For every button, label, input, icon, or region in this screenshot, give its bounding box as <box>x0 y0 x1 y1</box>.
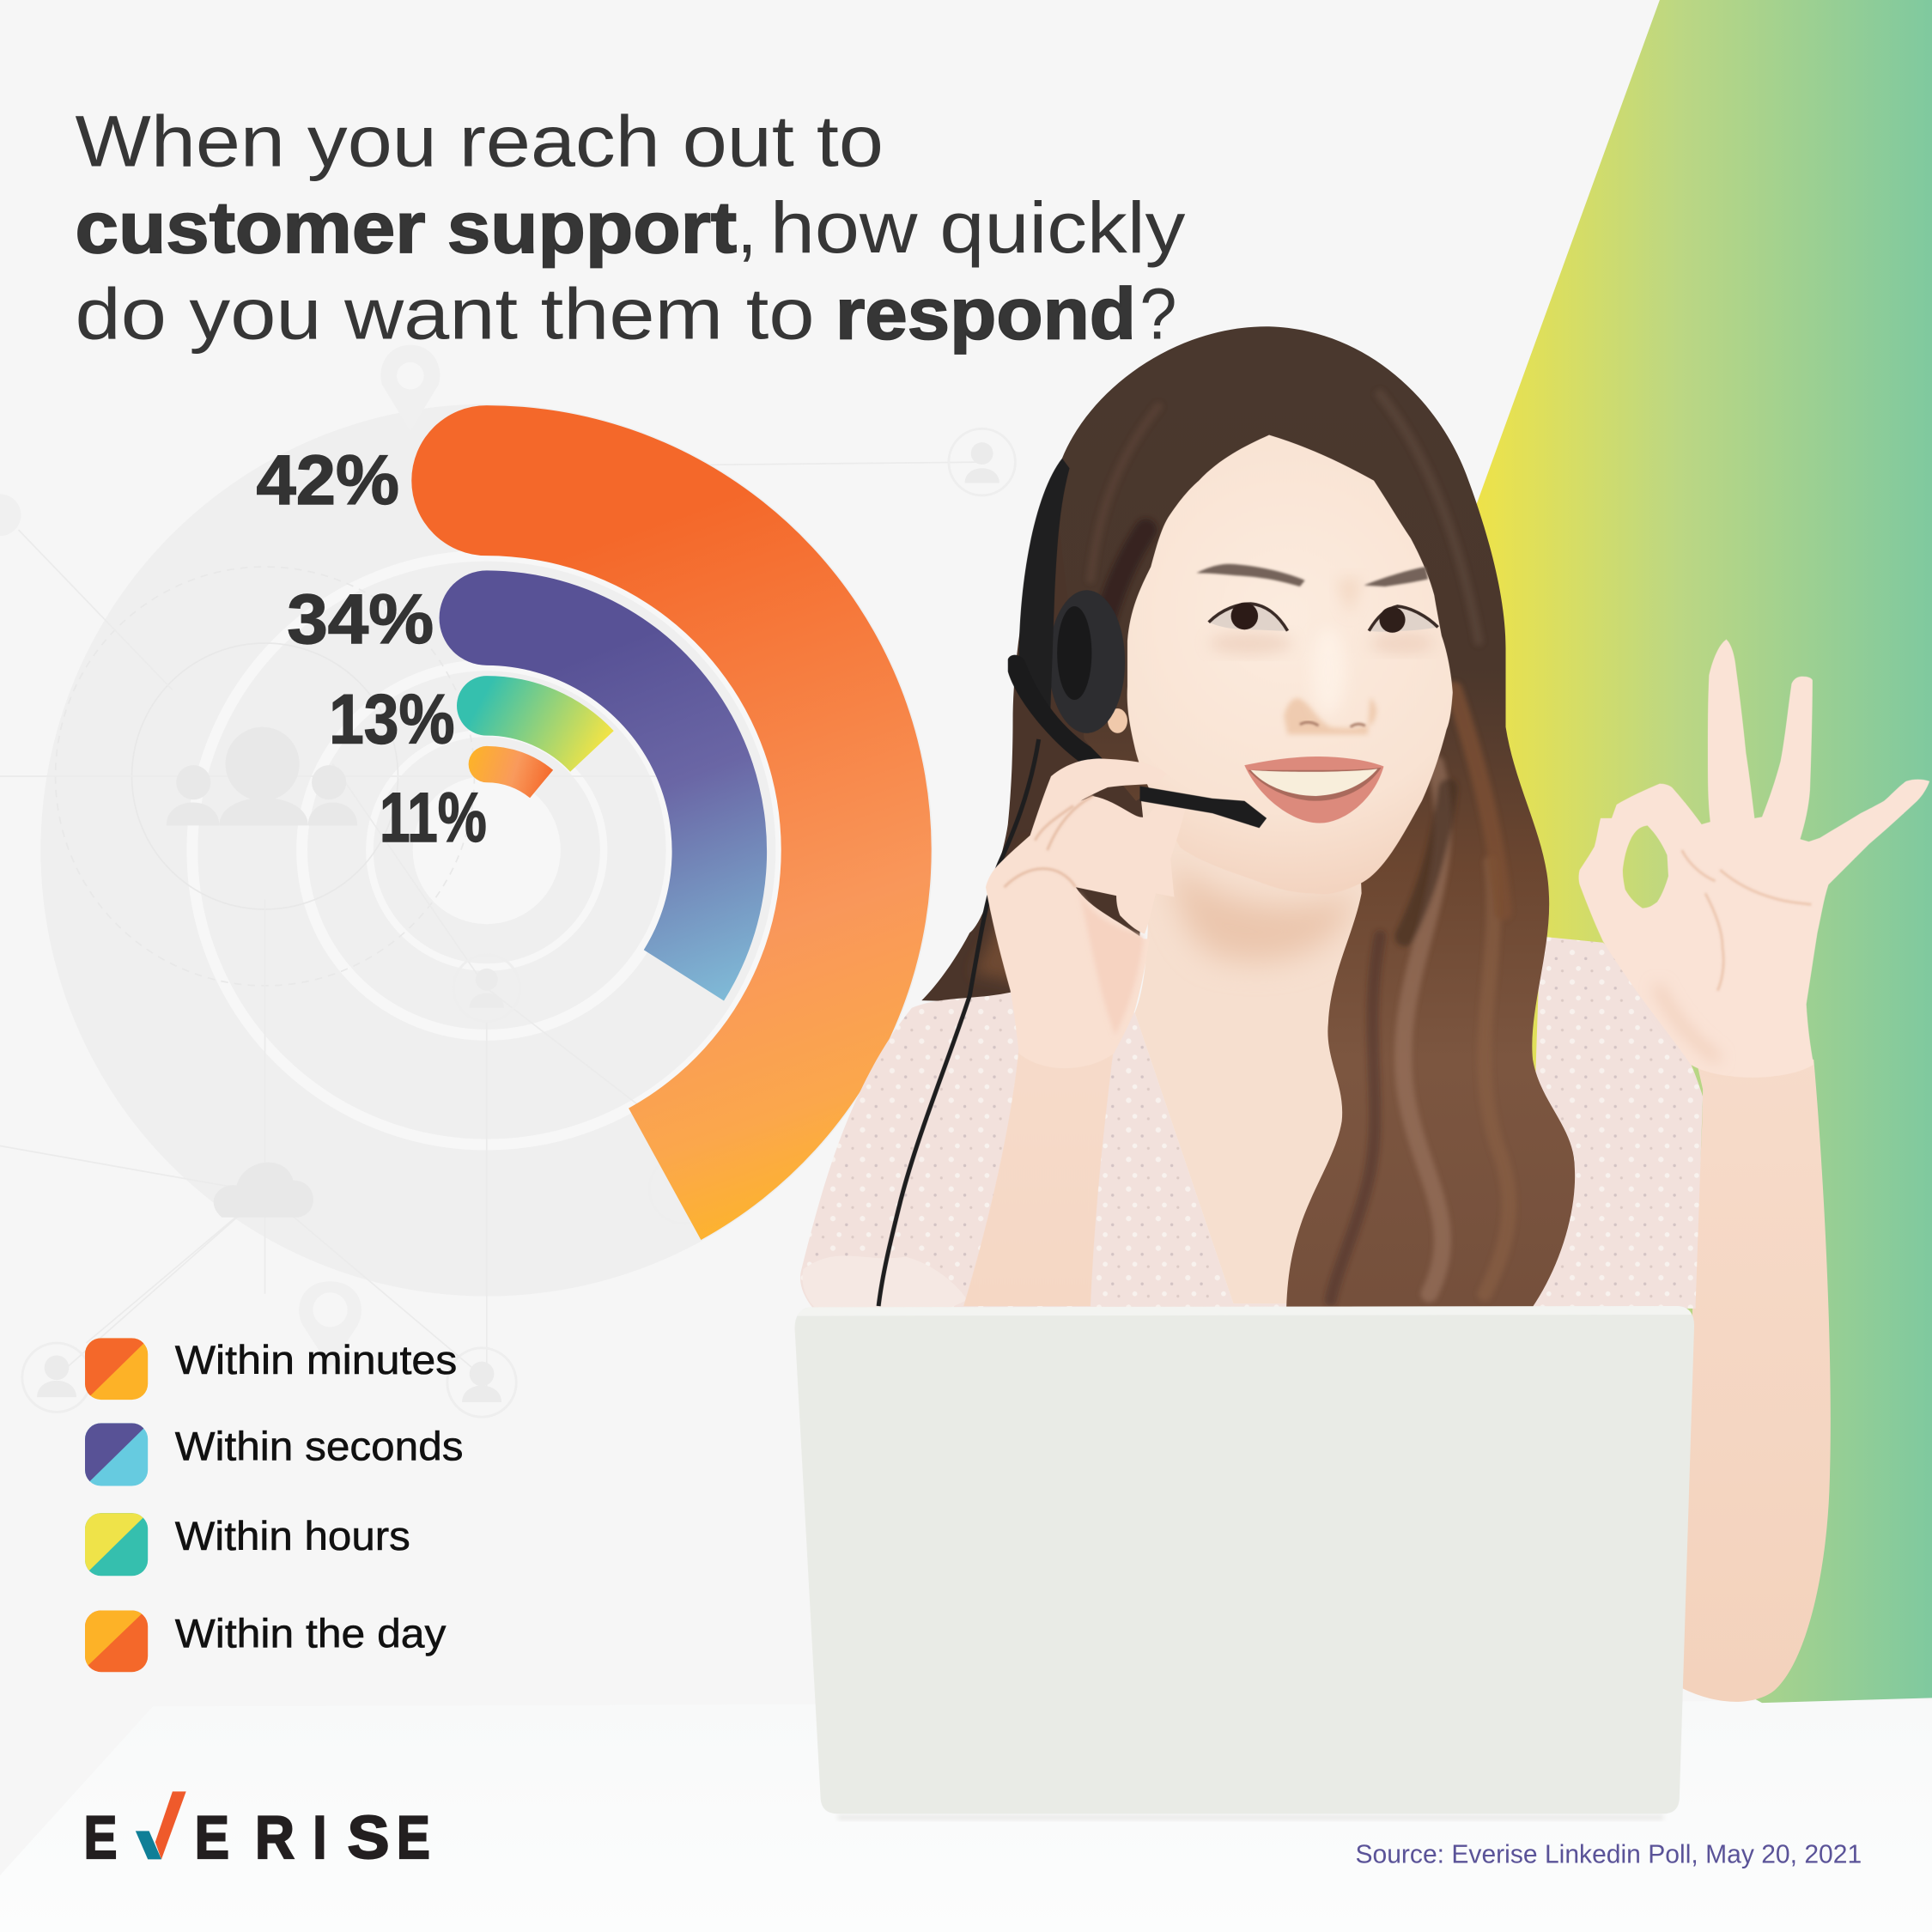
green gradient panel <box>1355 0 1932 1703</box>
bar: within minutes 42% <box>411 405 932 1240</box>
title: , <box>737 186 757 268</box>
headset cable <box>878 739 1039 1306</box>
finger details <box>1004 796 1093 887</box>
right arm <box>1682 1035 1831 1702</box>
legend item: within hours: Within hours <box>175 1514 410 1559</box>
Everise logo: S <box>348 1803 389 1871</box>
percentage labels: 34% <box>287 580 434 659</box>
radial bar chart <box>411 405 932 1240</box>
Everise logo: I <box>313 1803 326 1871</box>
microphone tip <box>1139 786 1267 828</box>
bar: within hours 13% <box>457 676 614 772</box>
legend item: within seconds: Within seconds <box>175 1424 464 1469</box>
Everise logo: R <box>255 1803 295 1871</box>
legend item: within minutes <box>85 1338 457 1401</box>
legend item: within the day: Within the day <box>175 1612 447 1657</box>
legend item: within minutes: Within minutes <box>175 1338 457 1383</box>
hair main <box>1060 326 1575 1309</box>
Everise logo: E <box>397 1803 430 1871</box>
left arm <box>963 1048 1114 1306</box>
woman with headset <box>800 326 1929 1702</box>
microphone boom <box>1008 655 1103 769</box>
hair strands <box>1091 394 1509 1300</box>
legend item: within seconds <box>85 1423 464 1486</box>
bar: within the day 11% <box>469 746 553 798</box>
table surface <box>0 1700 1932 1932</box>
face <box>1127 435 1453 894</box>
title: customer support <box>76 186 737 268</box>
palm creases <box>1682 850 1811 991</box>
eyes <box>1209 604 1288 631</box>
ear <box>1108 708 1127 733</box>
title: respond <box>835 273 1136 355</box>
neck and chest <box>1135 788 1405 1303</box>
title: ? <box>1139 273 1176 355</box>
title: do you want them to <box>76 273 815 355</box>
face shading <box>1209 579 1434 734</box>
back hair left <box>921 468 1146 1002</box>
right hand OK gesture <box>1579 640 1929 1078</box>
percentage labels: 42% <box>256 441 399 519</box>
nostrils <box>1300 722 1365 727</box>
title <box>76 100 1186 355</box>
headset ear pad <box>1048 590 1125 733</box>
headset band <box>1019 459 1070 727</box>
left hand <box>986 758 1185 1068</box>
Everise logo: E <box>195 1803 229 1871</box>
mouth <box>1244 756 1383 823</box>
blouse <box>800 937 1703 1309</box>
percentage labels: 13% <box>329 680 454 758</box>
source note: Source: Everise Linkedin Poll, May 20, 2021 <box>1355 1841 1862 1869</box>
Everise logo <box>84 1791 430 1871</box>
Everise logo: E <box>84 1803 117 1871</box>
sleeve frill <box>803 1256 967 1309</box>
legend item: within hours <box>85 1513 410 1576</box>
eyebrows <box>1196 564 1305 586</box>
legend item: within the day <box>85 1608 447 1672</box>
percentage labels <box>256 441 487 857</box>
legend <box>85 1338 464 1672</box>
laptop <box>795 1306 1694 1820</box>
title: When you reach out to <box>76 100 884 182</box>
background network decoration <box>0 345 1015 1417</box>
percentage labels: 11% <box>380 779 487 857</box>
bar: within seconds 34% <box>440 570 767 1000</box>
title: how quickly <box>770 186 1186 268</box>
